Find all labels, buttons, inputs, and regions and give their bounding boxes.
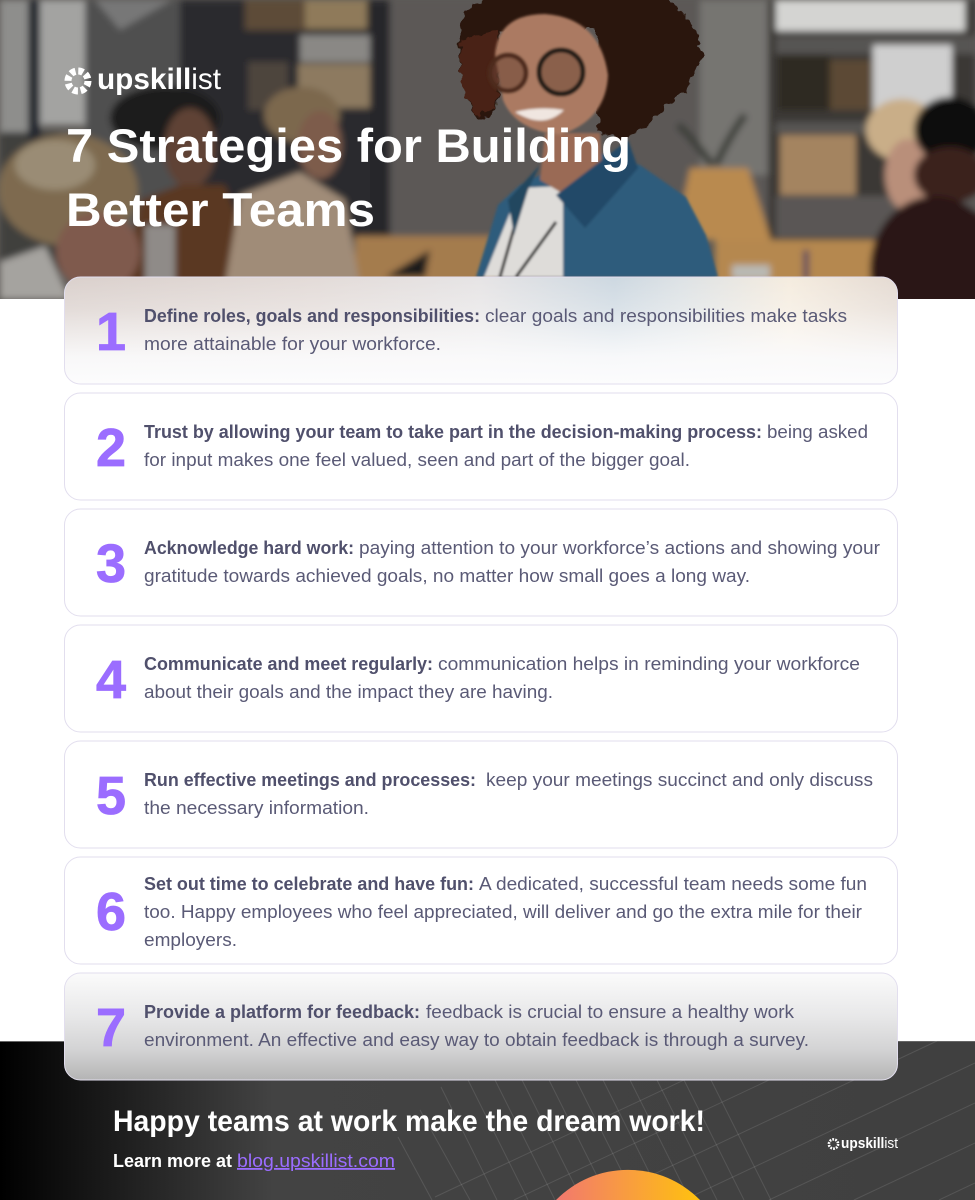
- strategy 7 text: feedback is crucial to ensure a healthy work: [426, 1002, 795, 1022]
- strategy 1 text: Define roles, goals and responsibilities:: [144, 306, 480, 326]
- strategy 5 text: the necessary information.: [144, 798, 369, 818]
- number 4: 4: [96, 650, 126, 710]
- panel: strategy 2: [64, 393, 898, 500]
- woman's face: [490, 14, 608, 135]
- strategy 3 text: [144, 538, 880, 586]
- strategy 2 text: for input makes one feel valued, seen and part of the bigger goal.: [144, 450, 690, 470]
- strategy 2 text: Trust by allowing your team to take part in the decision-making process:: [144, 422, 762, 442]
- number 7: 7: [96, 998, 126, 1058]
- number 3: 3: [96, 534, 126, 594]
- panel: strategy 6: [64, 857, 898, 964]
- number 1: 1: [96, 302, 126, 362]
- panel: strategy 1: [64, 277, 898, 384]
- title: [66, 119, 631, 236]
- footer call to action: blog.upskillist.com: [237, 1151, 395, 1171]
- panel: strategy 4: [64, 625, 898, 732]
- strategy 6 text: [144, 874, 867, 950]
- strategy 3 text: paying attention to your workforce’s actions and showing your: [359, 538, 880, 558]
- strategy 5 text: Run effective meetings and processes:: [144, 770, 476, 790]
- strategy 4 text: about their goals and the impact they are having.: [144, 682, 553, 702]
- strategy 2 text: [144, 422, 868, 470]
- panel: strategy 5: [64, 741, 898, 848]
- title: 7 Strategies for Building: [66, 119, 631, 172]
- strategy 7 text: environment. An effective and easy way to obtain feedback is through a survey.: [144, 1030, 809, 1050]
- upskillist logo: upskillist: [97, 63, 222, 96]
- strategy 4 text: [144, 654, 860, 702]
- panel: strategy 3: [64, 509, 898, 616]
- number 6: 6: [96, 882, 126, 942]
- strategy 2 text: being asked: [767, 422, 868, 442]
- woman's curly hair: [460, 0, 701, 140]
- strategy 3 text: gratitude towards achieved goals, no matter how small goes a long way.: [144, 566, 750, 586]
- footer call to action: [113, 1151, 395, 1171]
- strategy 6 text: employers.: [144, 930, 237, 950]
- title: Better Teams: [66, 183, 375, 236]
- strategy 6 text: Set out time to celebrate and have fun:: [144, 874, 474, 894]
- strategy 6 text: too. Happy employees who feel appreciated, will deliver and go the extra mile for their: [144, 902, 862, 922]
- hero photo: team meeting in an office: [0, 0, 975, 299]
- footer banner: [0, 1041, 975, 1200]
- strategy 3 text: Acknowledge hard work:: [144, 538, 354, 558]
- footer headline: Happy teams at work make the dream work!: [113, 1105, 705, 1138]
- strategy 6 text: A dedicated, successful team needs some fun: [479, 874, 867, 894]
- number 2: 2: [96, 418, 126, 478]
- strategy 7 text: Provide a platform for feedback:: [144, 1002, 420, 1022]
- strategy 1 text: more attainable for your workforce.: [144, 334, 441, 354]
- footer call to action: Learn more at: [113, 1151, 232, 1171]
- decorative orange circle: [556, 1170, 700, 1200]
- strategy 1 text: [144, 306, 847, 354]
- panel: strategy 7: [64, 973, 898, 1080]
- strategy 5 text: keep your meetings succinct and only discuss: [486, 770, 873, 790]
- strategy 4 text: Communicate and meet regularly:: [144, 654, 433, 674]
- strategy 1 text: clear goals and responsibilities make tasks: [485, 306, 847, 326]
- strategy 7 text: [144, 1002, 809, 1050]
- strategy 5 text: [144, 770, 873, 818]
- number 5: 5: [96, 766, 126, 826]
- small upskillist logo: upskillist: [841, 1135, 899, 1152]
- strategy 4 text: communication helps in reminding your workforce: [438, 654, 860, 674]
